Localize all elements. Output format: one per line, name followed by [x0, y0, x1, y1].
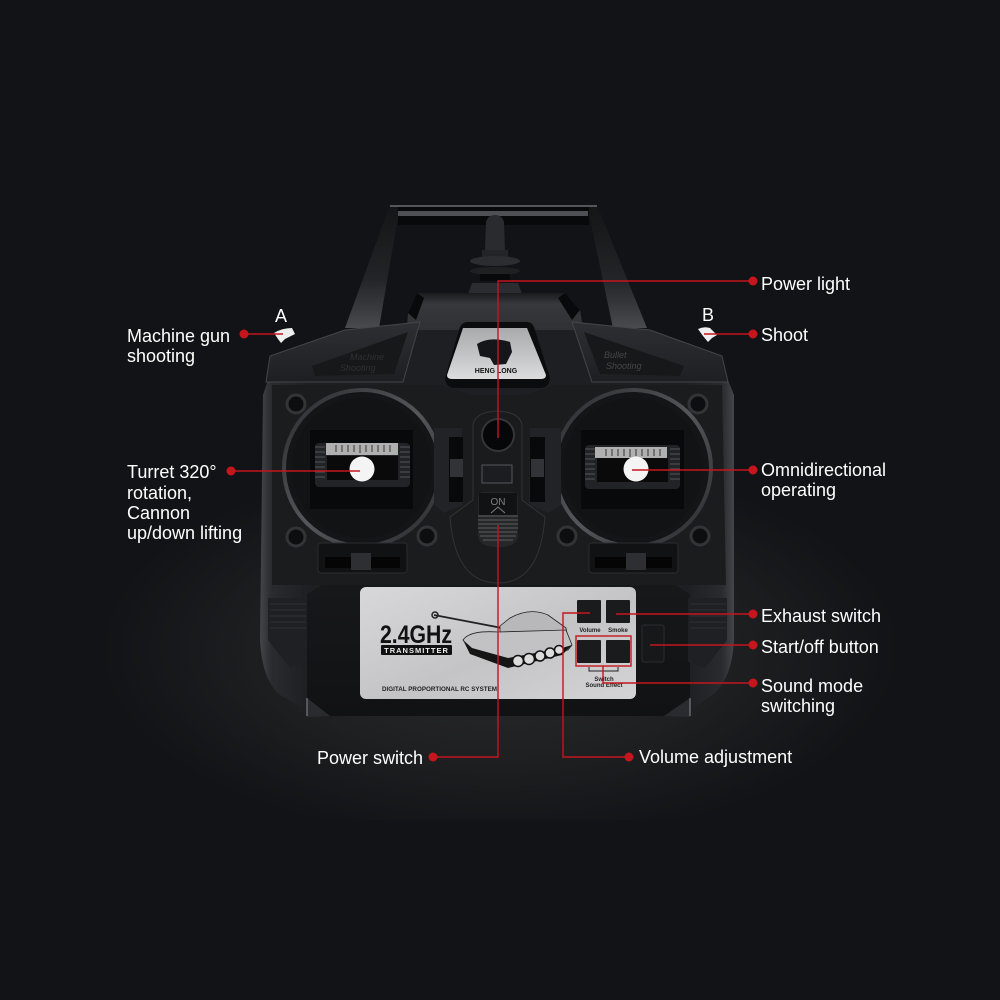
label: sound mode switching: Sound mode [761, 676, 863, 696]
label: power switch: Power switch [317, 748, 423, 768]
system caption: DIGITAL PROPORTIONAL RC SYSTEM [382, 686, 497, 693]
label: omnidirectional operating: Omnidirectional [761, 460, 886, 480]
left shoulder panel [266, 322, 420, 382]
faceplate [272, 385, 726, 585]
label: sound mode switching: switching [761, 696, 835, 716]
label: shoot: Shoot [761, 325, 808, 345]
label: volume adjustment: Volume adjustment [639, 747, 792, 767]
label: turret rotation and cannon lifting: Turret 320° [127, 462, 217, 482]
label: machine gun shooting: shooting [127, 346, 195, 366]
top hump [403, 293, 592, 382]
label: exhaust switch: Exhaust switch [761, 606, 881, 626]
label plate [360, 587, 636, 699]
label: start/off button: Start/off button [761, 637, 879, 657]
left shoulder panel: Shooting [340, 363, 376, 373]
2.4GHz logo: 2.4GHz [380, 621, 452, 649]
centre column: ON [490, 497, 506, 508]
left shoulder panel: Machine [350, 352, 384, 362]
feet [307, 698, 690, 717]
centre column [450, 411, 545, 583]
right shoulder panel [572, 322, 728, 382]
vertical trim sliders [434, 428, 561, 513]
left stick gimbal [284, 390, 440, 546]
transmitter tag: TRANSMITTER [384, 646, 449, 655]
plate buttons [577, 600, 630, 663]
button captions: Volume [579, 628, 601, 634]
carry handle [345, 205, 647, 328]
start/off button [642, 625, 664, 662]
button captions [579, 628, 628, 689]
label: B: B [702, 305, 714, 325]
label: omnidirectional operating: operating [761, 480, 836, 500]
label: turret rotation and cannon lifting: Cannon [127, 503, 190, 523]
right shoulder panel: Shooting [606, 361, 642, 371]
side grips [268, 598, 727, 668]
transmitter device [260, 205, 734, 717]
right stick gimbal [555, 390, 711, 546]
antenna stub [468, 215, 522, 297]
label: power light: Power light [761, 274, 850, 294]
main body shell [260, 330, 734, 716]
brand badge: HENG LONG [475, 368, 518, 375]
button captions: Sound Effect [586, 683, 623, 689]
screws [287, 395, 709, 546]
label: A: A [275, 306, 287, 326]
callout dots [226, 276, 758, 762]
callout leader lines [231, 281, 753, 757]
tank illustration [432, 612, 572, 668]
horizontal trim sliders [318, 543, 678, 573]
lower body block [307, 585, 690, 716]
side buttons A and B [274, 327, 717, 343]
button captions: Switch [594, 677, 614, 683]
label: turret rotation and cannon lifting: up/down lifting [127, 523, 242, 543]
label: machine gun shooting: Machine gun [127, 326, 230, 346]
button captions: Smoke [608, 628, 628, 634]
right shoulder panel: Bullet [604, 350, 627, 360]
label: turret rotation and cannon lifting: rotation, [127, 483, 192, 503]
brand badge [445, 322, 550, 388]
